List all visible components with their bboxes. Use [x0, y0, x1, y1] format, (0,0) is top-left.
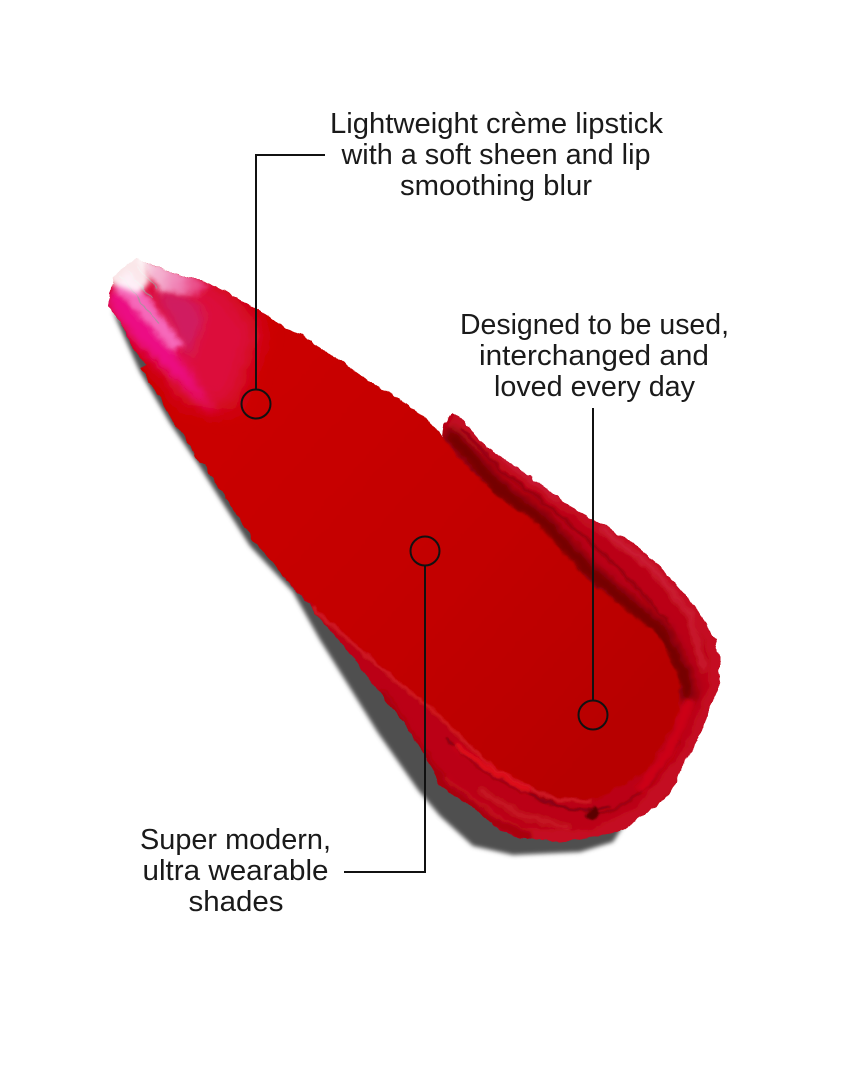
callout: super modern shades: shades [188, 886, 284, 918]
tip: white fade [95, 245, 150, 294]
dark crease [447, 432, 690, 700]
swatch shadow [112, 310, 640, 855]
secondary ridge fold [462, 428, 670, 625]
callout: lightweight crème lipstick: Lightweight crème lipstick [330, 108, 663, 140]
callout: super modern shades: Super modern, [140, 824, 331, 856]
callout: designed to be used: loved every day [494, 371, 695, 403]
callout: designed to be used [460, 309, 729, 730]
lipstick swatch [90, 240, 720, 842]
outer ridge tone [380, 418, 716, 838]
tip: light pink streak [112, 272, 184, 352]
tip: grey bristle lines [120, 266, 158, 322]
lower ridge lower crease [447, 738, 610, 810]
tip: pale top streak [134, 254, 212, 296]
callout: lightweight crème lipstick: with a soft sheen and lip [341, 139, 650, 171]
callout: designed to be used: interchanged and [479, 340, 709, 372]
tear at bottom of ridge [585, 805, 600, 820]
callout: super modern shades: ultra wearable [142, 855, 328, 887]
swatch ridge base [108, 259, 720, 842]
callout: super modern shades [140, 536, 440, 918]
callout: designed to be used: Designed to be used, [460, 309, 729, 341]
lower ridge highlights [312, 607, 590, 802]
tip: magenta streak [104, 285, 218, 418]
callout: lightweight crème lipstick: smoothing blur [400, 170, 592, 202]
tip: rose shade [155, 290, 205, 360]
callout: lightweight crème lipstick [242, 108, 663, 418]
flat colour area [90, 240, 680, 800]
tip: crimson wash [108, 250, 262, 410]
